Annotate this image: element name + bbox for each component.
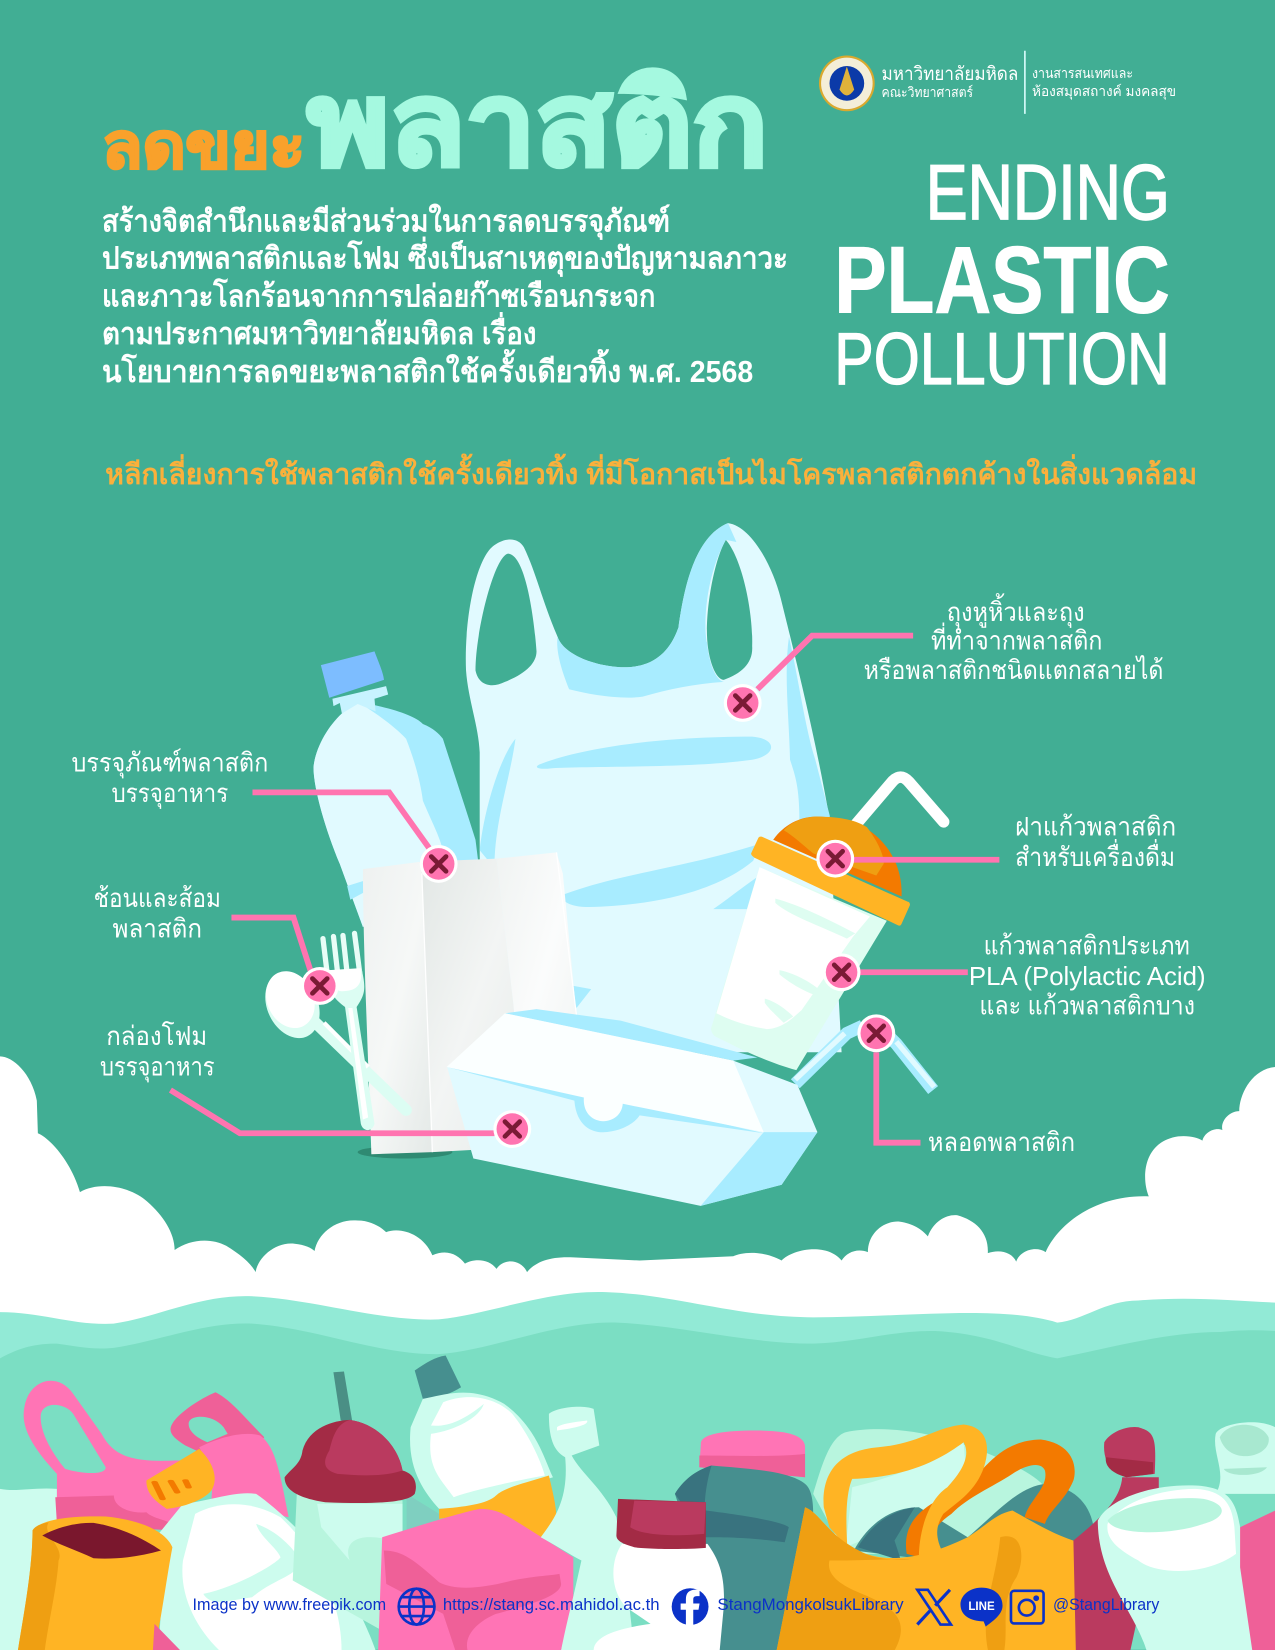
dark red bottle right <box>1073 1427 1159 1650</box>
illustration: spoon and fork <box>255 933 406 1130</box>
text block: intro paragraph: ประเภทพลาสติกและโฟม ซึ่งเป็นสาเหตุของปัญหามลภาวะ <box>102 237 788 278</box>
icon: LINE: LINE <box>968 1601 995 1613</box>
white clouds <box>0 1056 1275 1368</box>
teal bottle with pink top <box>675 1431 813 1650</box>
illustration: white paper bag <box>358 852 576 1158</box>
label: spoon and fork: ช้อนและส้อม <box>94 883 221 913</box>
label: straw: หลอดพลาสติก <box>928 1127 1075 1157</box>
marker: bag <box>724 684 762 722</box>
label: spoon and fork: พลาสติก <box>113 914 202 944</box>
heading: ending plastic pollution: ENDING <box>926 150 1170 236</box>
thin mint bottle <box>541 1407 620 1650</box>
white bottle <box>159 1493 376 1650</box>
illustration: foam food box <box>447 1009 817 1206</box>
pink bag left <box>24 1381 203 1531</box>
label: foam box <box>100 1021 215 1082</box>
marker: straw <box>857 1014 895 1052</box>
marker: cup <box>823 953 861 991</box>
title: พลาสติก <box>307 59 768 189</box>
logo: university seal and name: ห้องสมุดสถางค์ มงคลสุข <box>1032 83 1176 100</box>
pink box <box>378 1509 573 1650</box>
orange tag <box>146 1449 215 1509</box>
heading: ending plastic pollution <box>834 150 1170 400</box>
footer contact bar <box>193 1588 1160 1627</box>
heading: ending plastic pollution: POLLUTION <box>834 317 1170 400</box>
label: PLA cup: PLA (Polylactic Acid) <box>969 961 1206 991</box>
water waves <box>0 1292 1275 1650</box>
icon: LINE <box>960 1588 1003 1627</box>
footer contact bar: @StangLibrary <box>1053 1595 1160 1614</box>
callout lines and markers <box>170 636 999 1148</box>
logo: university seal and name <box>819 51 1176 114</box>
illustration: plastic bottle <box>313 651 480 927</box>
icon: instagram <box>1011 1591 1044 1623</box>
bottle with red cap and straw <box>285 1372 439 1631</box>
label: cup lid: ฝาแก้วพลาสติก <box>1015 812 1176 842</box>
marker: spoon and fork <box>301 967 339 1005</box>
label: PLA cup: แก้วพลาสติกประเภท <box>984 930 1190 960</box>
white bottle with teal cap <box>410 1356 556 1541</box>
label: plastic bags: ถุงหูหิ้วและถุง <box>947 593 1085 628</box>
label: food packaging: บรรจุอาหาร <box>112 778 228 809</box>
icon: facebook <box>672 1588 709 1626</box>
marker: food packaging <box>420 845 458 883</box>
label: PLA cup: และ แก้วพลาสติกบาง <box>979 990 1195 1020</box>
label: cup lid: สำหรับเครื่องดื่ม <box>1015 839 1175 872</box>
white cup right <box>1098 1485 1252 1650</box>
text block: intro paragraph: สร้างจิตสำนึกและมีส่วนร่วมในการลดบรรจุภัณฑ์ <box>102 204 670 241</box>
logo: university seal and name: งานสารสนเทศและ <box>1032 66 1133 81</box>
icon: globe <box>399 1589 434 1625</box>
yellow shopping bag <box>777 1507 1094 1650</box>
illustration: plastic cup with lid and straw <box>711 777 944 1070</box>
label: foam box: กล่องโฟม <box>106 1021 207 1051</box>
text block: intro paragraph: ตามประกาศมหาวิทยาลัยมหิดล เรื่อง <box>102 312 537 351</box>
label: plastic bags: หรือพลาสติกชนิดแตกสลายได้ <box>864 655 1163 685</box>
footer contact bar: StangMongkolsukLibrary <box>717 1595 904 1614</box>
label: foam box: บรรจุอาหาร <box>100 1051 215 1082</box>
illustration: plastic straw <box>795 1026 934 1090</box>
label: food packaging <box>72 747 268 809</box>
mint bag and handles <box>813 1425 1094 1561</box>
label: plastic bags <box>864 593 1163 685</box>
text block: intro paragraph: และภาวะโลกร้อนจากการปล่อยก๊าซเรือนกระจก <box>102 277 655 313</box>
title: ลดขยะ <box>102 112 305 182</box>
title <box>102 59 768 189</box>
logo: university seal and name: คณะวิทยาศาสตร์ <box>882 84 973 100</box>
bottle with red cap <box>561 1499 724 1650</box>
label: PLA cup <box>969 930 1206 1020</box>
heading: ending plastic pollution: PLASTIC <box>834 228 1170 334</box>
text block: intro paragraph <box>102 204 788 389</box>
label: cup lid <box>1015 812 1176 872</box>
footer contact bar: https://stang.sc.mahidol.ac.th <box>443 1595 660 1614</box>
text block: intro paragraph: นโยบายการลดขยะพลาสติกใช้ครั้งเดียวทิ้ง พ.ศ. 2568 <box>102 349 753 389</box>
icon: X <box>917 1590 951 1625</box>
marker: cup lid <box>816 840 854 878</box>
pink bag middle <box>170 1392 289 1517</box>
yellow tube front left <box>18 1516 181 1650</box>
subtitle: หลีกเลี่ยงการใช้พลาสติกใช้ครั้งเดียวทิ้ง ที่มีโอกาสเป็นไมโครพลาสติกตกค้างในสิ่งแวดล้อม <box>105 453 1197 491</box>
logo: university seal and name: มหาวิทยาลัยมหิดล <box>882 64 1018 85</box>
illustration: pile of plastic waste <box>0 1356 1275 1650</box>
label: spoon and fork <box>94 883 221 944</box>
illustration: plastic bag <box>466 523 842 1052</box>
label: plastic bags: ที่ทำจากพลาสติก <box>931 622 1102 655</box>
marker: foam box <box>493 1110 531 1148</box>
footer contact bar: Image by www.freepik.com <box>193 1595 386 1614</box>
label: food packaging: บรรจุภัณฑ์พลาสติก <box>72 747 268 778</box>
